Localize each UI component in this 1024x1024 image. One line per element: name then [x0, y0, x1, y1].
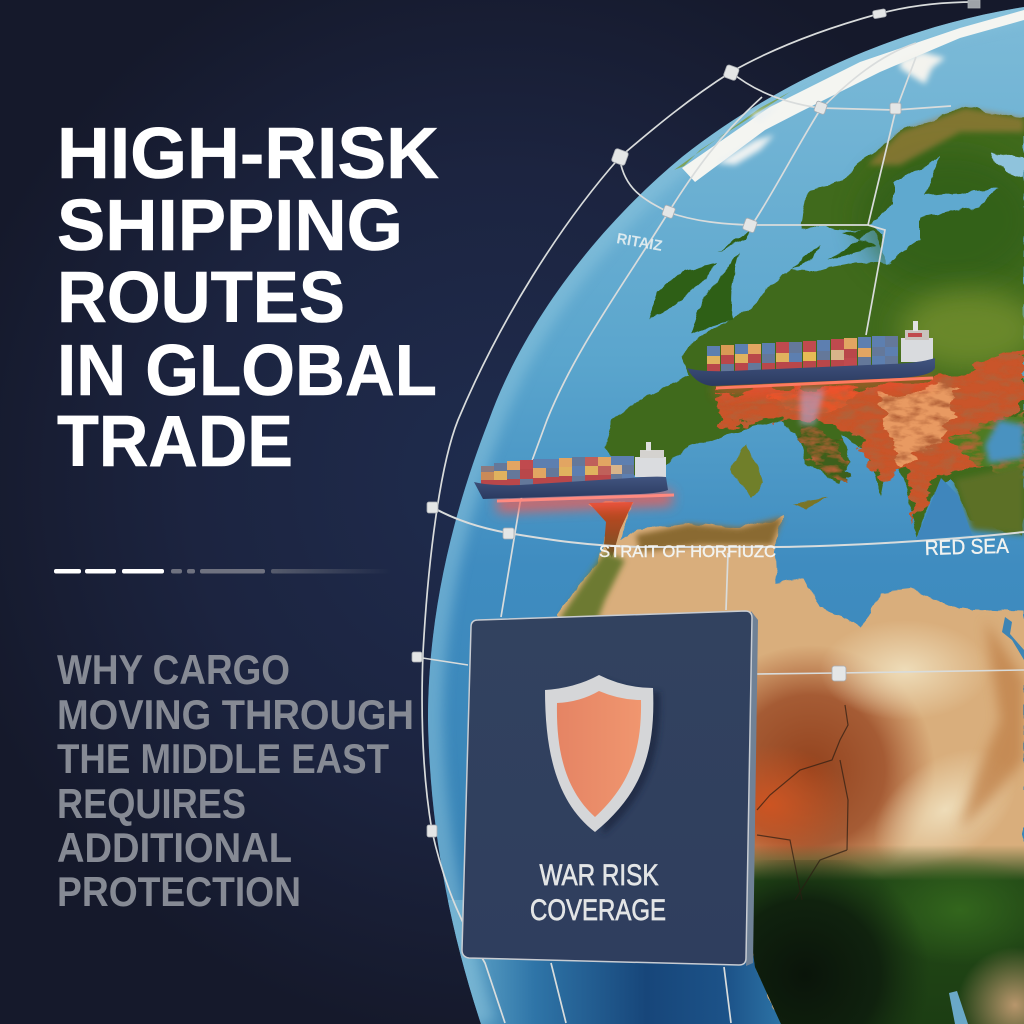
- rust desert zone: [754, 650, 930, 870]
- Atlas ridge: [636, 517, 783, 552]
- map surface: [428, 7, 1024, 1024]
- containers: [481, 456, 634, 489]
- title: SHIPPING: [57, 186, 403, 266]
- container ship: upper: [687, 321, 935, 388]
- panel face: [462, 611, 752, 965]
- southeast highlands: [957, 947, 1024, 1024]
- eastern bay: [985, 420, 1024, 463]
- northern lake: [990, 152, 1024, 178]
- container ship: lower: [474, 442, 674, 501]
- hull: [474, 477, 668, 499]
- globe limb highlight: [428, 7, 1024, 1024]
- title: TRADE: [57, 402, 293, 482]
- lower ocean shading: [440, 900, 800, 1024]
- globe label: Red Sea: RED SEA: [925, 535, 1009, 560]
- subtitle: MOVING THROUGH: [57, 691, 414, 738]
- divider dashes: [54, 569, 391, 574]
- olive plains: [900, 290, 1024, 370]
- Ireland island: [647, 263, 716, 320]
- eastern ridge: [960, 620, 1024, 830]
- equatorial forest: [740, 845, 1024, 1024]
- panel side edge: [746, 611, 758, 966]
- eastern land strip: [955, 465, 1024, 535]
- subtitle: [57, 646, 414, 915]
- subtitle: THE MIDDLE EAST: [57, 735, 389, 782]
- Iberian red coast: [589, 502, 633, 558]
- red terrain belt: [715, 345, 1024, 525]
- shipping route network: [412, 0, 1024, 1023]
- west Sahara green: [557, 549, 628, 616]
- subtitle: WHY CARGO: [57, 646, 290, 693]
- dark Scandinavian green: [860, 150, 1024, 290]
- subtitle: ADDITIONAL: [57, 824, 292, 871]
- continents: [558, 108, 1024, 1020]
- panel label: [530, 859, 666, 927]
- Arabian sea inlet: [916, 478, 972, 540]
- globe: [428, 7, 1024, 1024]
- hull: [687, 358, 935, 386]
- icon: shield: [545, 675, 660, 835]
- superstructure: [901, 321, 933, 362]
- title: HIGH-RISK: [57, 114, 439, 194]
- containers: [707, 336, 898, 376]
- ocean: [428, 7, 1024, 1024]
- Europe and Asia landmass: [605, 108, 1024, 537]
- northern ridge: [868, 108, 1024, 165]
- globe label: faded north Atlantic: RITAIZ: [615, 230, 664, 255]
- title: IN GLOBAL: [57, 331, 437, 411]
- title: ROUTES: [57, 258, 345, 338]
- ship glow beams: [497, 380, 932, 505]
- Red Sea inlet: [1002, 617, 1024, 660]
- superstructure: [635, 442, 666, 477]
- title: [57, 114, 439, 482]
- north Africa: [558, 502, 1024, 1020]
- African lake: [949, 991, 968, 1024]
- pale desert patches: [828, 627, 978, 716]
- red waterline: [497, 495, 674, 501]
- African rivers: [757, 705, 848, 900]
- polar ice band: [674, 10, 1024, 182]
- red waterline: [716, 378, 933, 388]
- panel label: WAR RISK: [540, 859, 658, 892]
- Baltic sea: [868, 157, 997, 263]
- lighter forest: [898, 860, 1024, 952]
- route nodes: [412, 0, 980, 837]
- subtitle: REQUIRES: [57, 780, 246, 827]
- Mediterranean islands: [730, 442, 764, 497]
- deep forest shadow: [753, 860, 913, 1024]
- panel: war risk coverage: [462, 611, 758, 966]
- Britain island: [689, 252, 739, 333]
- subtitle: PROTECTION: [57, 868, 301, 915]
- panel label: COVERAGE: [530, 894, 666, 927]
- small northern islands: [718, 230, 878, 270]
- globe label: Strait of Hormuz: STRAIT OF HORFIUZC: [599, 542, 776, 561]
